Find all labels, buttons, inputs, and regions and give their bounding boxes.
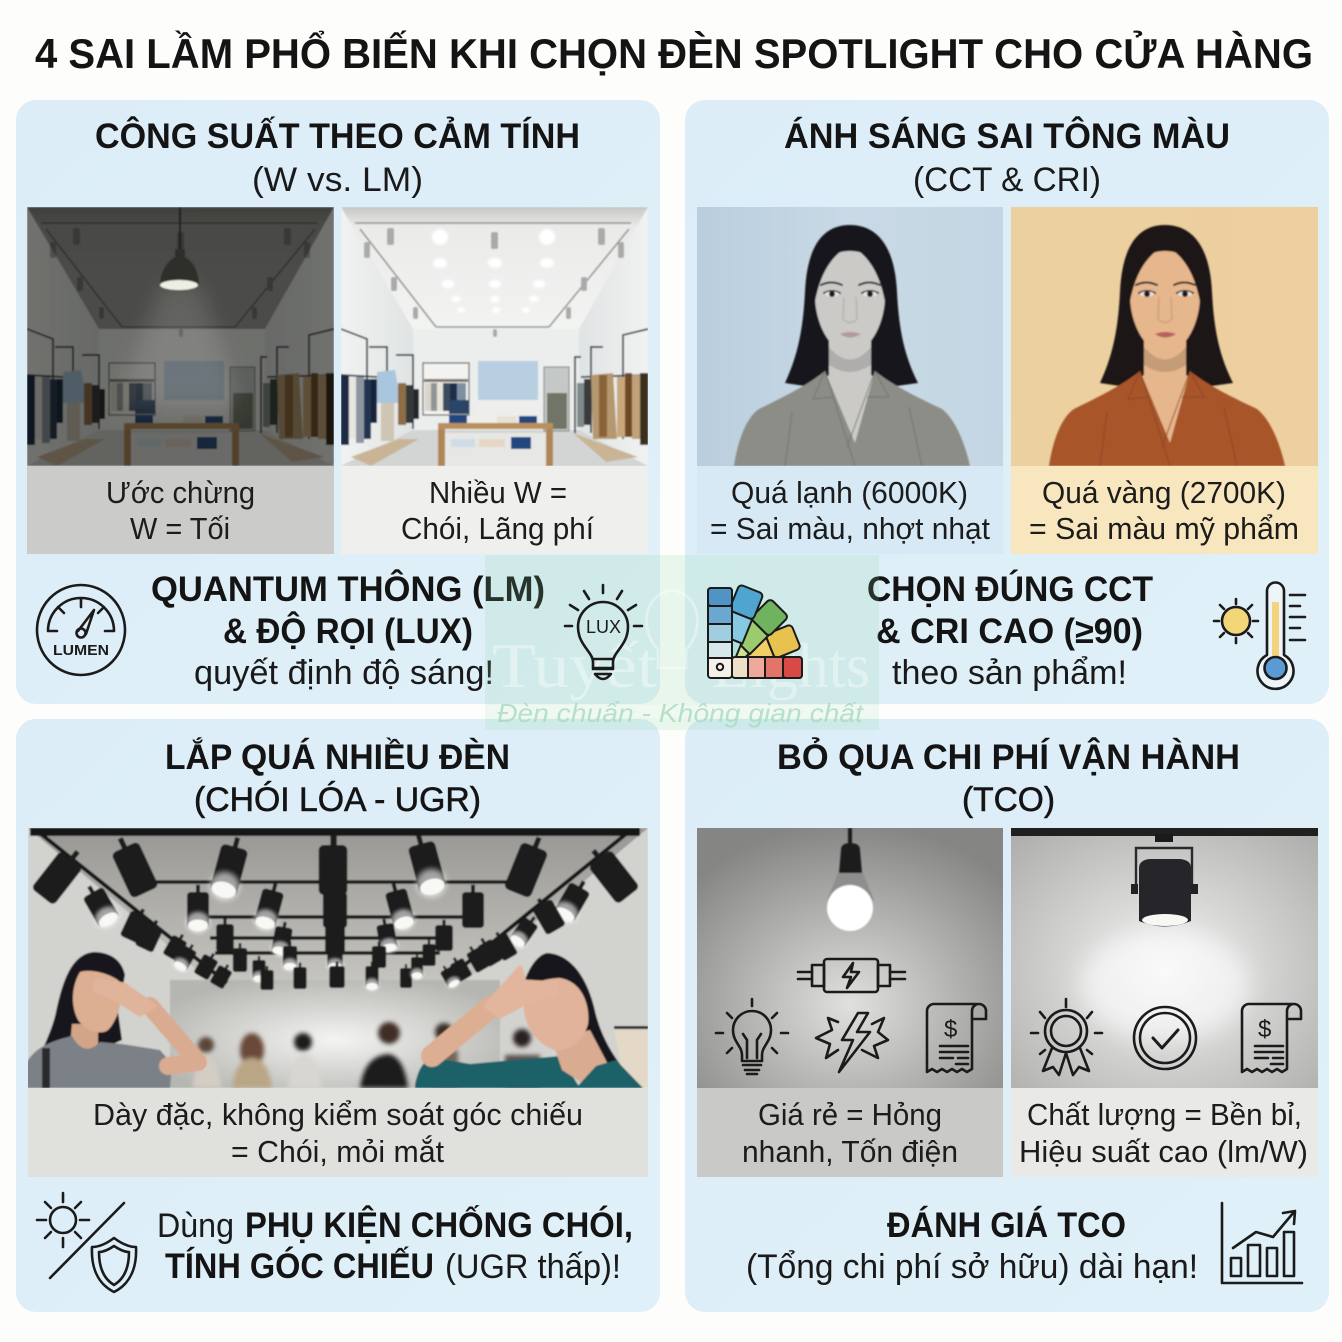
caption: quá lạnh: = Sai màu, nhợt nhạt xyxy=(710,511,990,546)
heading: công suất: CÔNG SUẤT THEO CẢM TÍNH xyxy=(95,116,580,156)
photo: cheap bulb with cost icons xyxy=(697,828,1003,1088)
tip: đánh giá tco: (Tổng chi phí sở hữu) dài hạn! xyxy=(746,1248,1198,1286)
tip: quantum thông xyxy=(151,569,545,692)
watermark: Tuyet Lights: Lights xyxy=(712,630,870,701)
icon: led driver xyxy=(798,959,905,992)
caption: ước chừng xyxy=(27,466,334,554)
icon: check circle xyxy=(1134,1007,1196,1069)
title: 4 SAI LẦM PHỔ BIẾN KHI CHỌN ĐÈN SPOTLIGHT CHO CỬA HÀNG xyxy=(35,28,1313,77)
icon: lumen gauge xyxy=(37,585,125,675)
icon: lux bulb: LUX xyxy=(586,617,621,637)
photo: warm portrait xyxy=(1011,207,1318,466)
tip: phụ kiện chống chói: (UGR thấp)! xyxy=(445,1248,621,1286)
tip: phụ kiện chống chói: Dùng xyxy=(157,1207,234,1245)
caption: nhiều W xyxy=(341,466,648,554)
tip: đánh giá tco xyxy=(746,1205,1198,1286)
caption: dày đặc: Dày đặc, không kiểm soát góc chiếu xyxy=(93,1097,583,1132)
heading: lắp quá nhiều đèn: (CHÓI LÓA - UGR) xyxy=(194,781,481,819)
heading: bỏ qua chi phí: (TCO) xyxy=(962,781,1055,819)
tip: phụ kiện chống chói: PHỤ KIỆN CHỐNG CHÓI, xyxy=(245,1205,633,1245)
heading: ánh sáng: (CCT & CRI) xyxy=(913,161,1101,199)
photo: crowded spotlights and glare xyxy=(28,828,648,1088)
heading: bỏ qua chi phí: BỎ QUA CHI PHÍ VẬN HÀNH xyxy=(777,737,1240,777)
photo: quality spotlight with icons xyxy=(1011,828,1318,1088)
caption: quá lạnh xyxy=(697,466,1003,554)
caption: giá rẻ: Giá rẻ = Hỏng xyxy=(758,1097,942,1132)
panel: công suất theo cảm tính xyxy=(16,100,660,704)
tip: quantum thông: quyết định độ sáng! xyxy=(194,654,494,692)
heading: ánh sáng xyxy=(784,116,1230,199)
caption: quá lạnh: Quá lạnh (6000K) xyxy=(731,475,968,510)
photo: dark store xyxy=(27,207,334,466)
photo: bright store xyxy=(341,207,648,466)
caption: giá rẻ xyxy=(697,1088,1003,1177)
panel: ánh sáng sai tông màu xyxy=(685,100,1329,704)
tip: phụ kiện chống chói: TÍNH GÓC CHIẾU xyxy=(165,1246,434,1286)
tip: quantum thông: QUANTUM THÔNG (LM) xyxy=(151,569,545,609)
icon: bill receipt xyxy=(1242,1004,1301,1072)
icon: quality medal xyxy=(1031,999,1102,1075)
icon: track spotlight xyxy=(1011,828,1318,926)
caption: nhiều W: Nhiều W = xyxy=(429,475,567,510)
watermark: Tuyet Lights xyxy=(485,555,879,730)
caption: ước chừng: Ước chừng xyxy=(106,475,255,510)
tip: đánh giá tco: ĐÁNH GIÁ TCO xyxy=(887,1205,1126,1245)
heading: lắp quá nhiều đèn xyxy=(165,737,510,819)
caption: chất lượng: Chất lượng = Bền bỉ, xyxy=(1027,1097,1302,1132)
caption: dày đặc: = Chói, mỏi mắt xyxy=(231,1134,444,1169)
icon: bill receipt: $ xyxy=(1258,1016,1271,1043)
heading: công suất: (W vs. LM) xyxy=(252,161,423,199)
tip: chọn đúng cct xyxy=(867,569,1153,692)
icon: bill receipt xyxy=(927,1004,986,1072)
caption: chất lượng xyxy=(1011,1088,1318,1177)
icon: bulb with socket xyxy=(827,828,874,931)
icon: lux bulb xyxy=(565,585,642,679)
icon: light bulb xyxy=(716,999,788,1074)
heading: bỏ qua chi phí xyxy=(777,737,1240,819)
heading: ánh sáng: ÁNH SÁNG SAI TÔNG MÀU xyxy=(784,116,1230,156)
panel: bỏ qua chi phí vận hành xyxy=(685,719,1329,1312)
tip: chọn đúng cct: & CRI CAO (≥90) xyxy=(876,612,1143,651)
woman right covering eyes xyxy=(415,953,648,1088)
caption: giá rẻ: nhanh, Tốn điện xyxy=(742,1134,958,1169)
caption: nhiều W: Chói, Lãng phí xyxy=(401,511,594,546)
caption: quá vàng: Quá vàng (2700K) xyxy=(1042,475,1286,510)
heading: công suất xyxy=(95,116,580,199)
caption: dày đặc xyxy=(28,1088,648,1177)
icon: glare and shield xyxy=(37,1193,136,1292)
icon: growth chart xyxy=(1222,1203,1302,1283)
tip: chọn đúng cct: theo sản phẩm! xyxy=(892,654,1127,692)
caption: quá vàng xyxy=(1011,466,1318,554)
photo: cold portrait xyxy=(697,207,1003,466)
watermark: Tuyet Lights: Đèn chuẩn - Không gian chất xyxy=(497,698,865,728)
tip: chọn đúng cct: CHỌN ĐÚNG CCT xyxy=(867,569,1153,609)
icon: bill receipt: $ xyxy=(944,1016,957,1043)
tip: quantum thông: & ĐỘ RỌI (LUX) xyxy=(223,611,473,651)
icon: color swatch fan xyxy=(708,584,802,678)
caption: chất lượng: Hiệu suất cao (lm/W) xyxy=(1019,1134,1308,1169)
panel: lắp quá nhiều đèn xyxy=(16,719,660,1312)
watermark: Tuyet Lights: Tuyết xyxy=(492,630,657,701)
caption: ước chừng: W = Tối xyxy=(130,511,230,546)
icon: power surge xyxy=(816,1013,888,1072)
heading: lắp quá nhiều đèn: LẮP QUÁ NHIỀU ĐÈN xyxy=(165,737,510,777)
icon: sun and thermometer xyxy=(1214,582,1305,689)
tip: phụ kiện chống chói xyxy=(157,1205,633,1286)
caption: quá vàng: = Sai màu mỹ phẩm xyxy=(1029,511,1299,546)
woman left covering eyes xyxy=(27,952,198,1088)
icon: lumen gauge: LUMEN xyxy=(53,642,109,659)
